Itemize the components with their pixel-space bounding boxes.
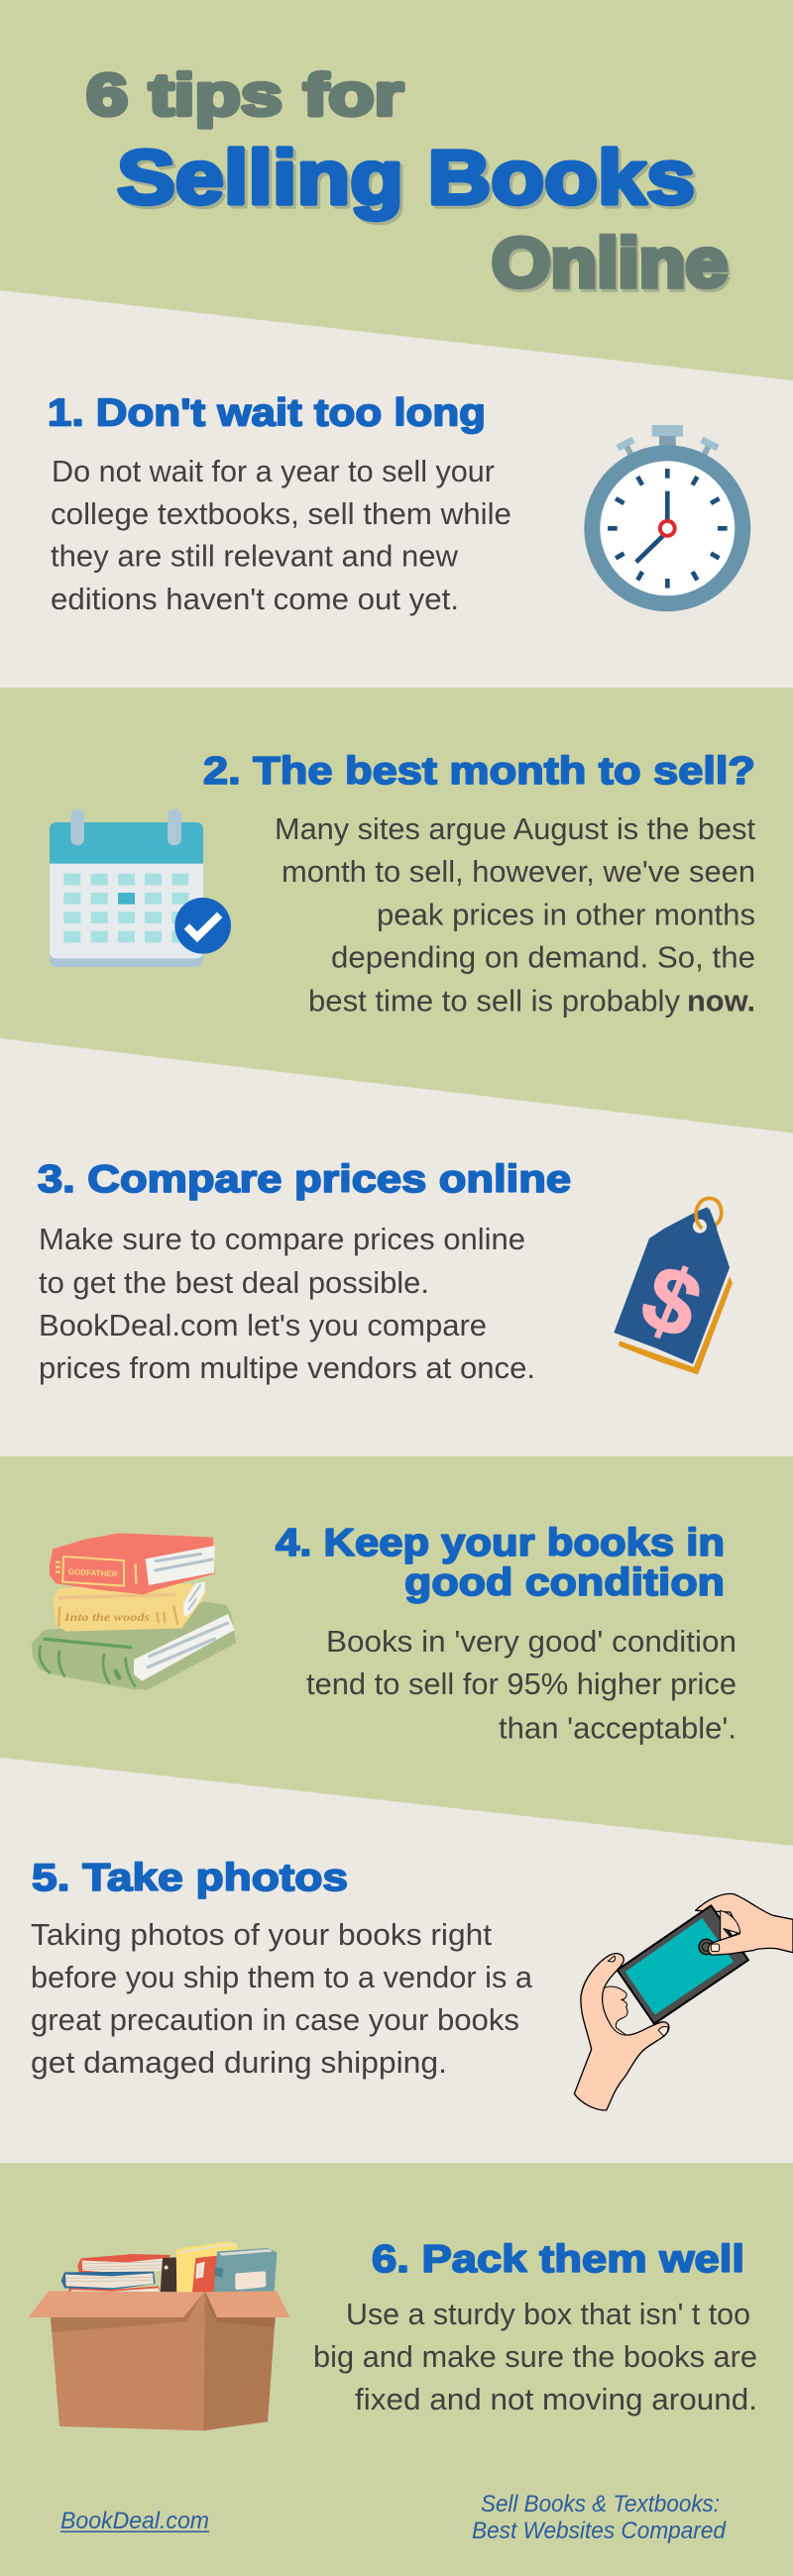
icon: stack of books: Into the woods xyxy=(63,1612,151,1624)
text: tip 4 body xyxy=(306,1624,736,1746)
heading: tip 1: 1. Don't wait too long xyxy=(48,392,486,434)
text: tip 4 body: Books in 'very good' condition xyxy=(326,1624,736,1659)
text: tip 5 body: get damaged during shipping. xyxy=(31,2045,447,2080)
title: Online: Online xyxy=(492,224,728,301)
text: tip 3 body: prices from multipe vendors at once. xyxy=(39,1350,535,1385)
heading: tip 2: 2. The best month to sell? xyxy=(203,750,755,793)
title: Selling Books: Selling Books xyxy=(117,135,695,220)
icon: calendar with check xyxy=(50,809,231,967)
link: Sell Books and Textbooks article: Sell Books & Textbooks: xyxy=(481,2491,720,2518)
text: tip 2 body: now. xyxy=(687,983,755,1019)
icon: cardboard box of books xyxy=(28,2241,289,2430)
link: Sell Books and Textbooks article: Best Websites Compared xyxy=(472,2518,727,2544)
text: tip 5 body xyxy=(31,1917,533,2080)
text: tip 1 body: college textbooks, sell them while xyxy=(51,496,511,531)
text: tip 6 body: big and make sure the books are xyxy=(313,2339,757,2374)
icon: price tag: $ xyxy=(628,1243,715,1358)
text: tip 3 body: to get the best deal possible. xyxy=(39,1265,429,1300)
panel: tip 5 xyxy=(0,1758,793,2163)
text: tip 3 body: Make sure to compare prices online xyxy=(39,1222,525,1256)
icon: price tag xyxy=(614,1198,733,1374)
heading: tip 6: 6. Pack them well xyxy=(372,2238,744,2281)
text: tip 2 body: peak prices in other months xyxy=(377,898,755,931)
text: tip 4 body: than 'acceptable'. xyxy=(499,1710,736,1746)
icon: stack of books: GODFATHER xyxy=(68,1566,118,1579)
panel: tip 3 xyxy=(0,1038,793,1456)
heading: tip 4: 4. Keep your books in xyxy=(276,1522,725,1564)
text: tip 1 body: Do not wait for a year to sell your xyxy=(52,454,495,488)
text: tip 1 body: they are still relevant and new xyxy=(51,539,459,573)
text: tip 6 body: Use a sturdy box that isn' t too xyxy=(346,2297,750,2331)
text: tip 2 body xyxy=(275,811,755,1019)
text: tip 5 body: great precaution in case your books xyxy=(31,2002,519,2037)
text: tip 6 body: fixed and not moving around. xyxy=(355,2382,757,2416)
text: tip 3 body xyxy=(39,1222,535,1385)
text: tip 1 body: editions haven't come out yet. xyxy=(51,582,459,616)
title: Online: Online xyxy=(494,227,730,304)
text: tip 5 body: before you ship them to a vendor is a xyxy=(31,1960,533,1994)
panel: tip 2 xyxy=(0,688,793,1133)
text: tip 4 body: tend to sell for 95% higher price xyxy=(306,1666,736,1701)
title: 6 tips for: 6 tips for xyxy=(86,62,403,128)
panel: tip 1 xyxy=(0,290,793,688)
text: tip 2 body: best time to sell is probably xyxy=(308,983,680,1019)
panel: tip 6 xyxy=(0,2163,793,2576)
text: tip 1 body xyxy=(51,454,511,616)
text: tip 2 body: depending on demand. So, the xyxy=(331,939,755,975)
heading: tip 4: good condition xyxy=(404,1561,725,1604)
panel: title header xyxy=(0,0,793,380)
text: tip 2 body: month to sell, however, we've seen xyxy=(282,854,755,889)
icon: stack of books xyxy=(32,1533,236,1690)
heading: tip 5: 5. Take photos xyxy=(32,1857,348,1899)
icon: stopwatch xyxy=(584,425,750,611)
link: Sell Books and Textbooks article xyxy=(472,2491,727,2544)
text: tip 2 body: Many sites argue August is the best xyxy=(275,811,755,846)
icon: hands holding phone xyxy=(574,1893,793,2110)
text: tip 5 body: Taking photos of your books right xyxy=(31,1917,492,1952)
link: BookDeal.com: BookDeal.com xyxy=(60,2508,209,2534)
heading: tip 3: 3. Compare prices online xyxy=(38,1158,571,1201)
text: tip 3 body: BookDeal.com let's you compare xyxy=(39,1308,487,1342)
heading: tip 4 xyxy=(276,1522,725,1604)
panel: tip 4 xyxy=(0,1456,793,1846)
text: tip 6 body xyxy=(313,2297,757,2416)
title: Selling Books: Selling Books xyxy=(120,139,698,224)
